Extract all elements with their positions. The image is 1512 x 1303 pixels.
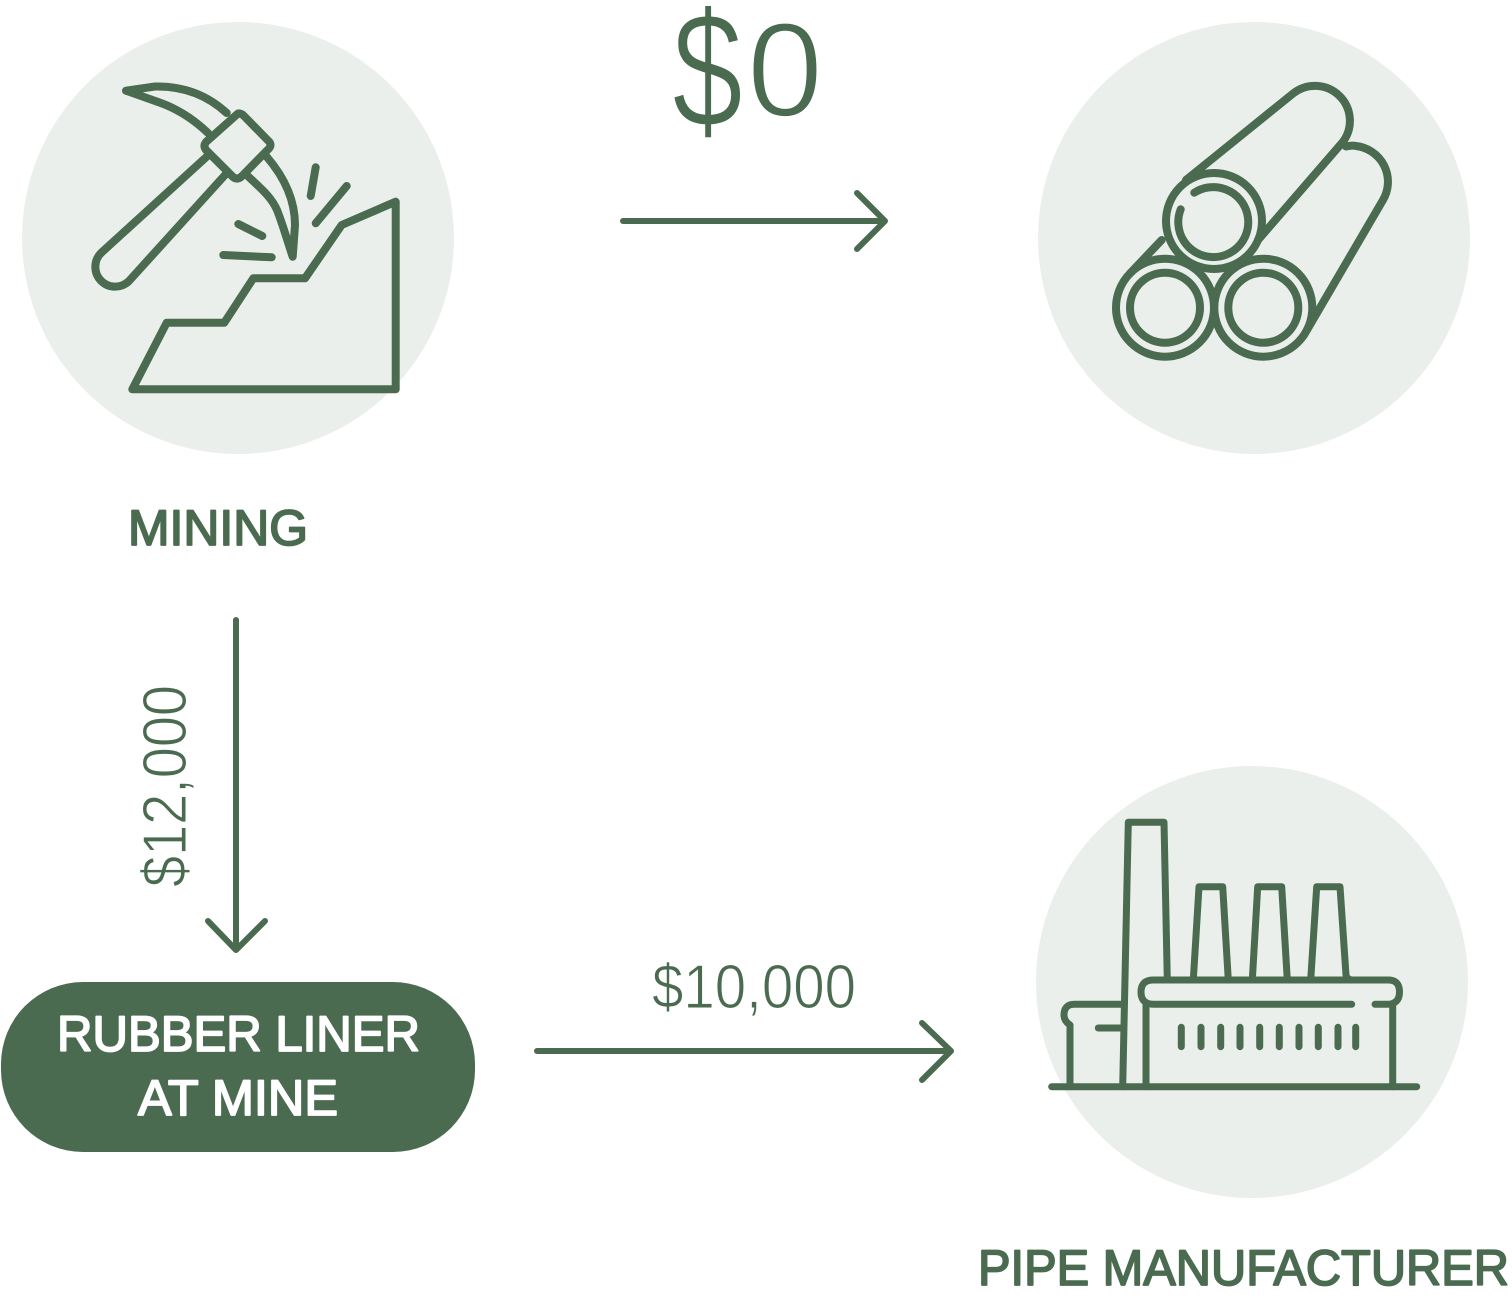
icon: factory (1052, 822, 1417, 1087)
node: pipe manufacturer (978, 766, 1509, 1296)
icon: pickaxe striking rock (95, 86, 396, 389)
node: rubber liner at mine (1, 982, 475, 1152)
mining background circle (22, 22, 454, 454)
node: pipes (1038, 22, 1470, 454)
pipes background circle (1038, 22, 1470, 454)
label: rubber liner at mine: RUBBER LINER (57, 1006, 420, 1062)
amount: $10,000: $10,000 (652, 953, 856, 1022)
label: mining: MINING (128, 500, 308, 556)
arrow: mining to pipes (623, 193, 885, 249)
amount: $12,000: $12,000 (131, 685, 200, 887)
factory background circle (1036, 766, 1468, 1198)
rubber liner pill (1, 982, 475, 1152)
arrow: rubber liner to manufacturer (537, 1023, 951, 1080)
arrow: mining to rubber liner (208, 620, 265, 950)
label: rubber liner at mine (57, 1006, 420, 1126)
label: rubber liner at mine: AT MINE (138, 1070, 338, 1126)
label: pipe manufacturer: PIPE MANUFACTURER (978, 1240, 1509, 1296)
amount: $0 (672, 0, 823, 162)
node: mining (22, 22, 454, 556)
icon: stacked pipes (1116, 86, 1388, 357)
amount: $0: 0 (747, 0, 823, 145)
